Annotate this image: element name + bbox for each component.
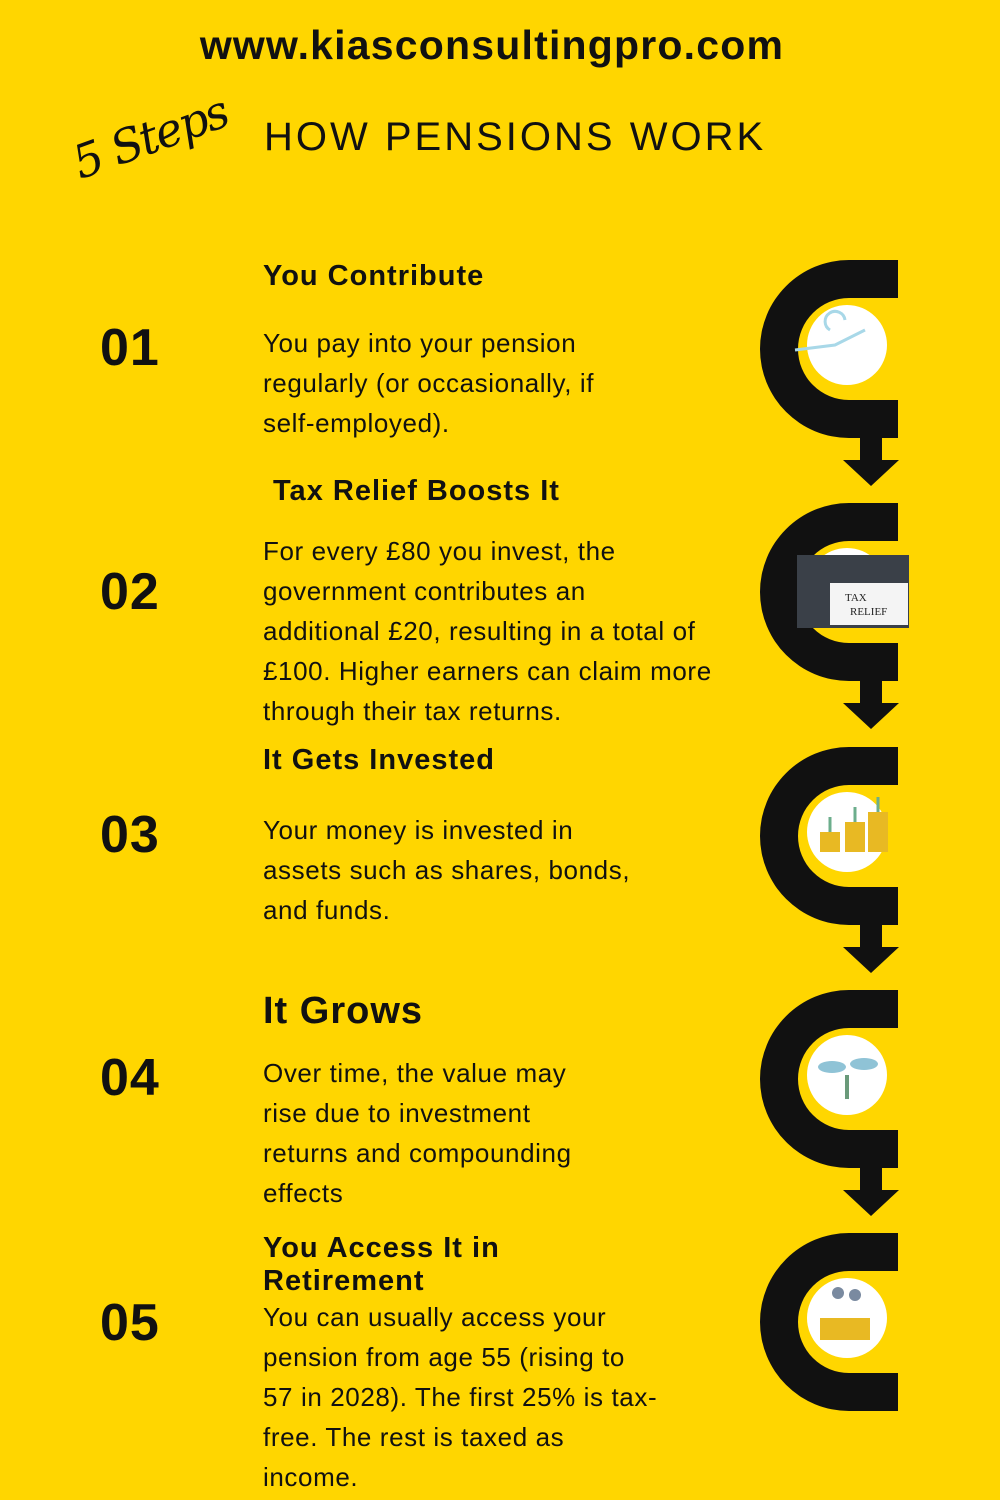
title: HOW PENSIONS WORK bbox=[264, 115, 766, 159]
step 02: Tax Relief Boosts It bbox=[273, 475, 560, 507]
step 03: It Gets Invested bbox=[263, 744, 495, 776]
script title: 5 Steps: 5 Steps bbox=[66, 84, 235, 190]
step 05: 05 bbox=[100, 1294, 160, 1352]
step 03: Your money is invested in bbox=[263, 815, 573, 845]
step 01: You Contribute bbox=[263, 260, 484, 292]
step 05 bbox=[100, 1232, 657, 1492]
step 05: 57 in 2028). The first 25% is tax- bbox=[263, 1382, 657, 1412]
step 03: and funds. bbox=[263, 895, 390, 925]
step 02: government contributes an bbox=[263, 576, 586, 606]
step 04: effects bbox=[263, 1178, 343, 1208]
step 04: Over time, the value may bbox=[263, 1058, 566, 1088]
step 01: self-employed). bbox=[263, 408, 450, 438]
step 02: through their tax returns. bbox=[263, 696, 562, 726]
step 04: 04 bbox=[100, 1049, 160, 1107]
step 2 icon: tax relief: RELIEF bbox=[850, 606, 887, 618]
website url: www.kiasconsultingpro.com bbox=[200, 22, 784, 68]
step 05: Retirement bbox=[263, 1265, 424, 1297]
step 04: rise due to investment bbox=[263, 1098, 531, 1128]
step 05: You can usually access your bbox=[263, 1302, 606, 1332]
step 2 icon: tax relief bbox=[760, 503, 909, 729]
step 04: returns and compounding bbox=[263, 1138, 572, 1168]
step 05: free. The rest is taxed as bbox=[263, 1422, 564, 1452]
step 03: assets such as shares, bonds, bbox=[263, 855, 630, 885]
step 1 icon: hands heart bbox=[760, 260, 899, 486]
step 02: £100. Higher earners can claim more bbox=[263, 656, 712, 686]
step 4 icon: sprout bbox=[760, 990, 899, 1216]
step 03 bbox=[100, 744, 630, 925]
step 05: You Access It in bbox=[263, 1232, 500, 1264]
step 01: regularly (or occasionally, if bbox=[263, 368, 594, 398]
step 04 bbox=[100, 990, 572, 1208]
step 01 bbox=[100, 260, 594, 438]
step 01: 01 bbox=[100, 319, 160, 377]
step 3 icon: coins plants bbox=[760, 747, 899, 973]
step 03: 03 bbox=[100, 806, 160, 864]
step 2 icon: tax relief: TAX bbox=[845, 592, 867, 604]
step 04: It Grows bbox=[263, 990, 423, 1032]
step 02 bbox=[100, 475, 712, 726]
step 01: You pay into your pension bbox=[263, 328, 576, 358]
step 02: For every £80 you invest, the bbox=[263, 536, 616, 566]
step 05: pension from age 55 (rising to bbox=[263, 1342, 625, 1372]
step 02: additional £20, resulting in a total of bbox=[263, 616, 695, 646]
step 05: income. bbox=[263, 1462, 358, 1492]
step 5 icon: retirees on coins bbox=[760, 1233, 898, 1411]
step 02: 02 bbox=[100, 563, 160, 621]
